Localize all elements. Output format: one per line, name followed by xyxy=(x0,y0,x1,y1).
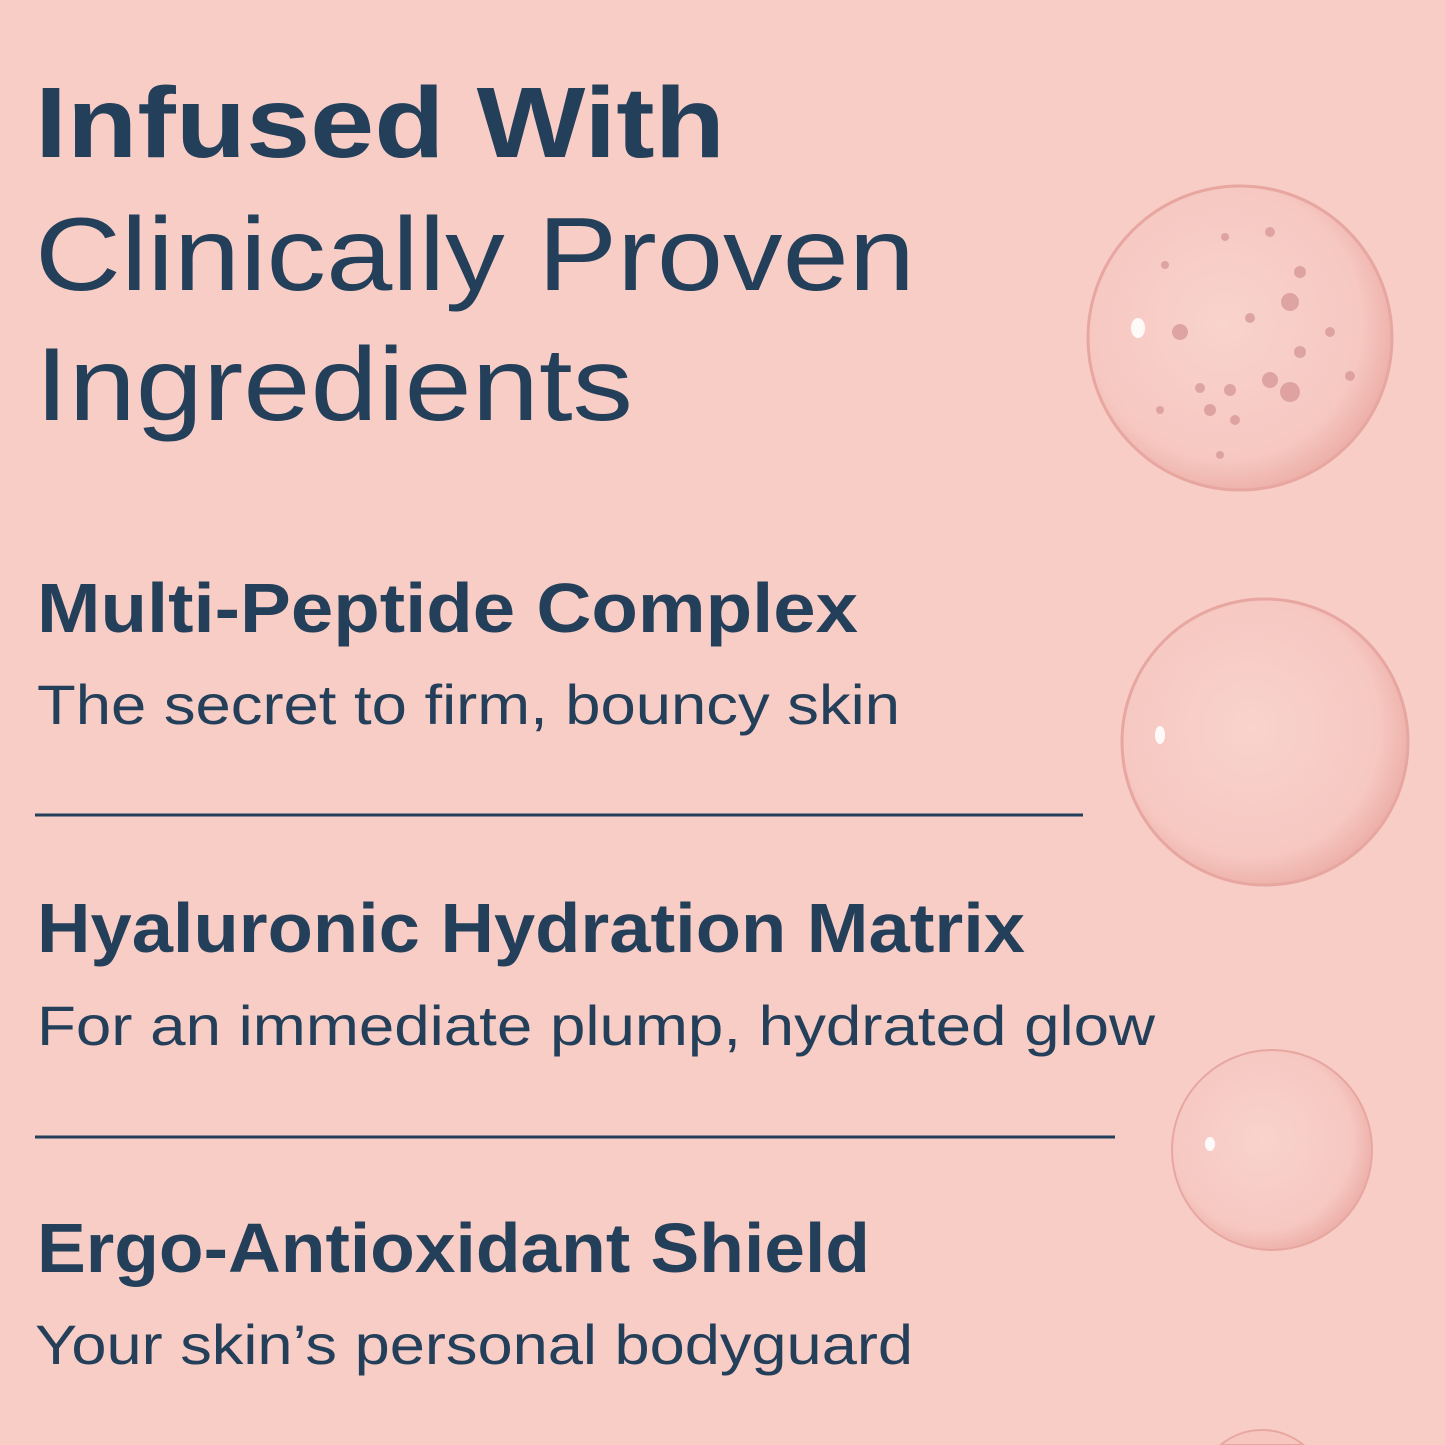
title: Ingredients xyxy=(35,327,633,443)
ingredient: antioxidant xyxy=(35,1209,913,1376)
ingredient: multi-peptide: The secret to firm, bouncy skin xyxy=(37,673,900,736)
ingredient: hyaluronic xyxy=(37,889,1156,1057)
drop 3 xyxy=(1172,1050,1372,1250)
title: Clinically Proven xyxy=(35,197,915,313)
title: Infused With xyxy=(35,67,725,179)
drop 4 partial xyxy=(1220,1430,1304,1445)
ingredient: antioxidant: Your skin’s personal bodyguard xyxy=(35,1313,913,1376)
title xyxy=(35,67,915,443)
drop 2 xyxy=(1122,599,1408,885)
ingredient: hyaluronic: For an immediate plump, hydrated glow xyxy=(37,994,1156,1057)
ingredient: hyaluronic: Hyaluronic Hydration Matrix xyxy=(37,889,1025,967)
ingredient: multi-peptide: Multi-Peptide Complex xyxy=(37,569,858,647)
ingredient: multi-peptide xyxy=(37,569,900,736)
drop 1 with specks xyxy=(1088,186,1392,490)
ingredient: antioxidant: Ergo-Antioxidant Shield xyxy=(37,1209,870,1287)
